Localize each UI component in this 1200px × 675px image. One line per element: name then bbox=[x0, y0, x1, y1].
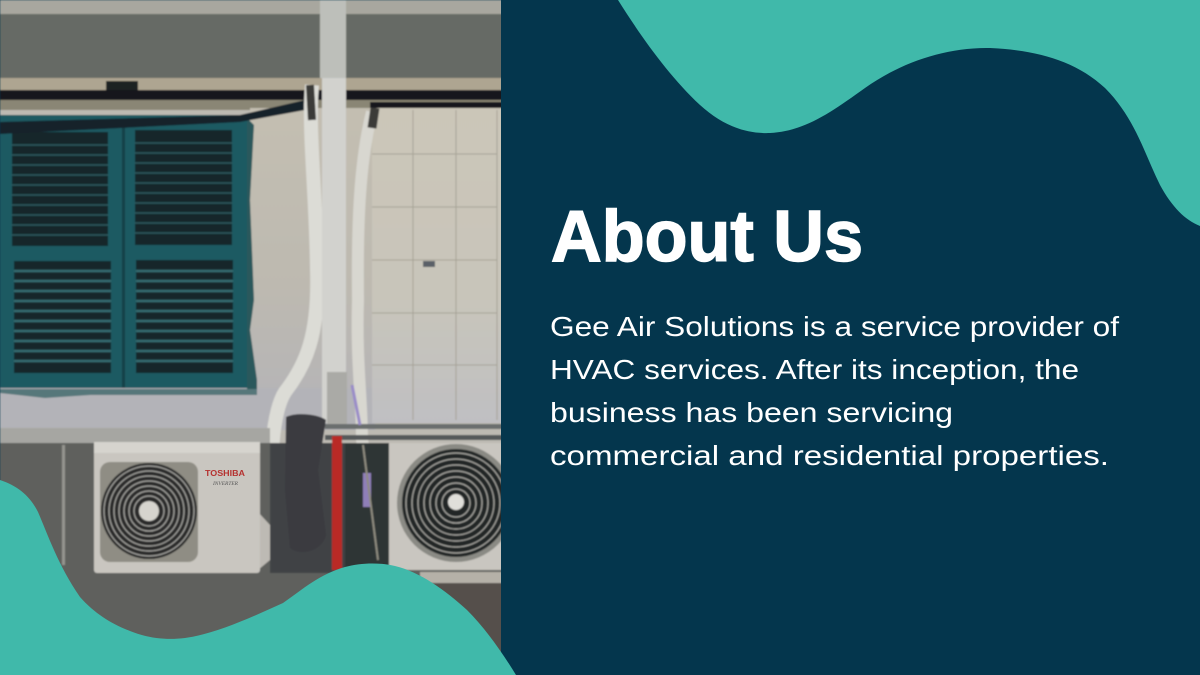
photo: building wall with air conditioners bbox=[0, 0, 520, 675]
red pipe bbox=[332, 436, 342, 570]
shutters bbox=[0, 115, 247, 388]
ledge bbox=[0, 428, 270, 443]
title: About Us bbox=[551, 197, 863, 277]
pipes bbox=[270, 85, 317, 530]
brand labels: INVERTER bbox=[212, 482, 238, 487]
text block: company description: HVAC services. After its inception, the bbox=[550, 354, 1079, 385]
text block: company description: business has been servicing bbox=[550, 397, 953, 428]
text block: company description: Gee Air Solutions is a service provider of bbox=[550, 311, 1119, 342]
AC 1 bbox=[258, 512, 270, 570]
wires over shutter bbox=[0, 100, 305, 134]
rails bbox=[325, 424, 515, 429]
granite bbox=[0, 442, 501, 639]
shape: bottom-left teal wave bbox=[0, 480, 516, 675]
purple tube bbox=[363, 473, 371, 507]
black cloth bbox=[284, 413, 327, 444]
shape: top-right teal wave bbox=[618, 0, 1200, 226]
wall bbox=[249, 107, 372, 112]
brand labels bbox=[205, 470, 245, 485]
text block: company description bbox=[550, 311, 1119, 471]
tiles bbox=[372, 106, 501, 423]
brand labels: TOSHIBA bbox=[205, 468, 245, 478]
AC 2 bbox=[388, 442, 501, 571]
text block: company description: commercial and residential properties. bbox=[550, 440, 1109, 471]
